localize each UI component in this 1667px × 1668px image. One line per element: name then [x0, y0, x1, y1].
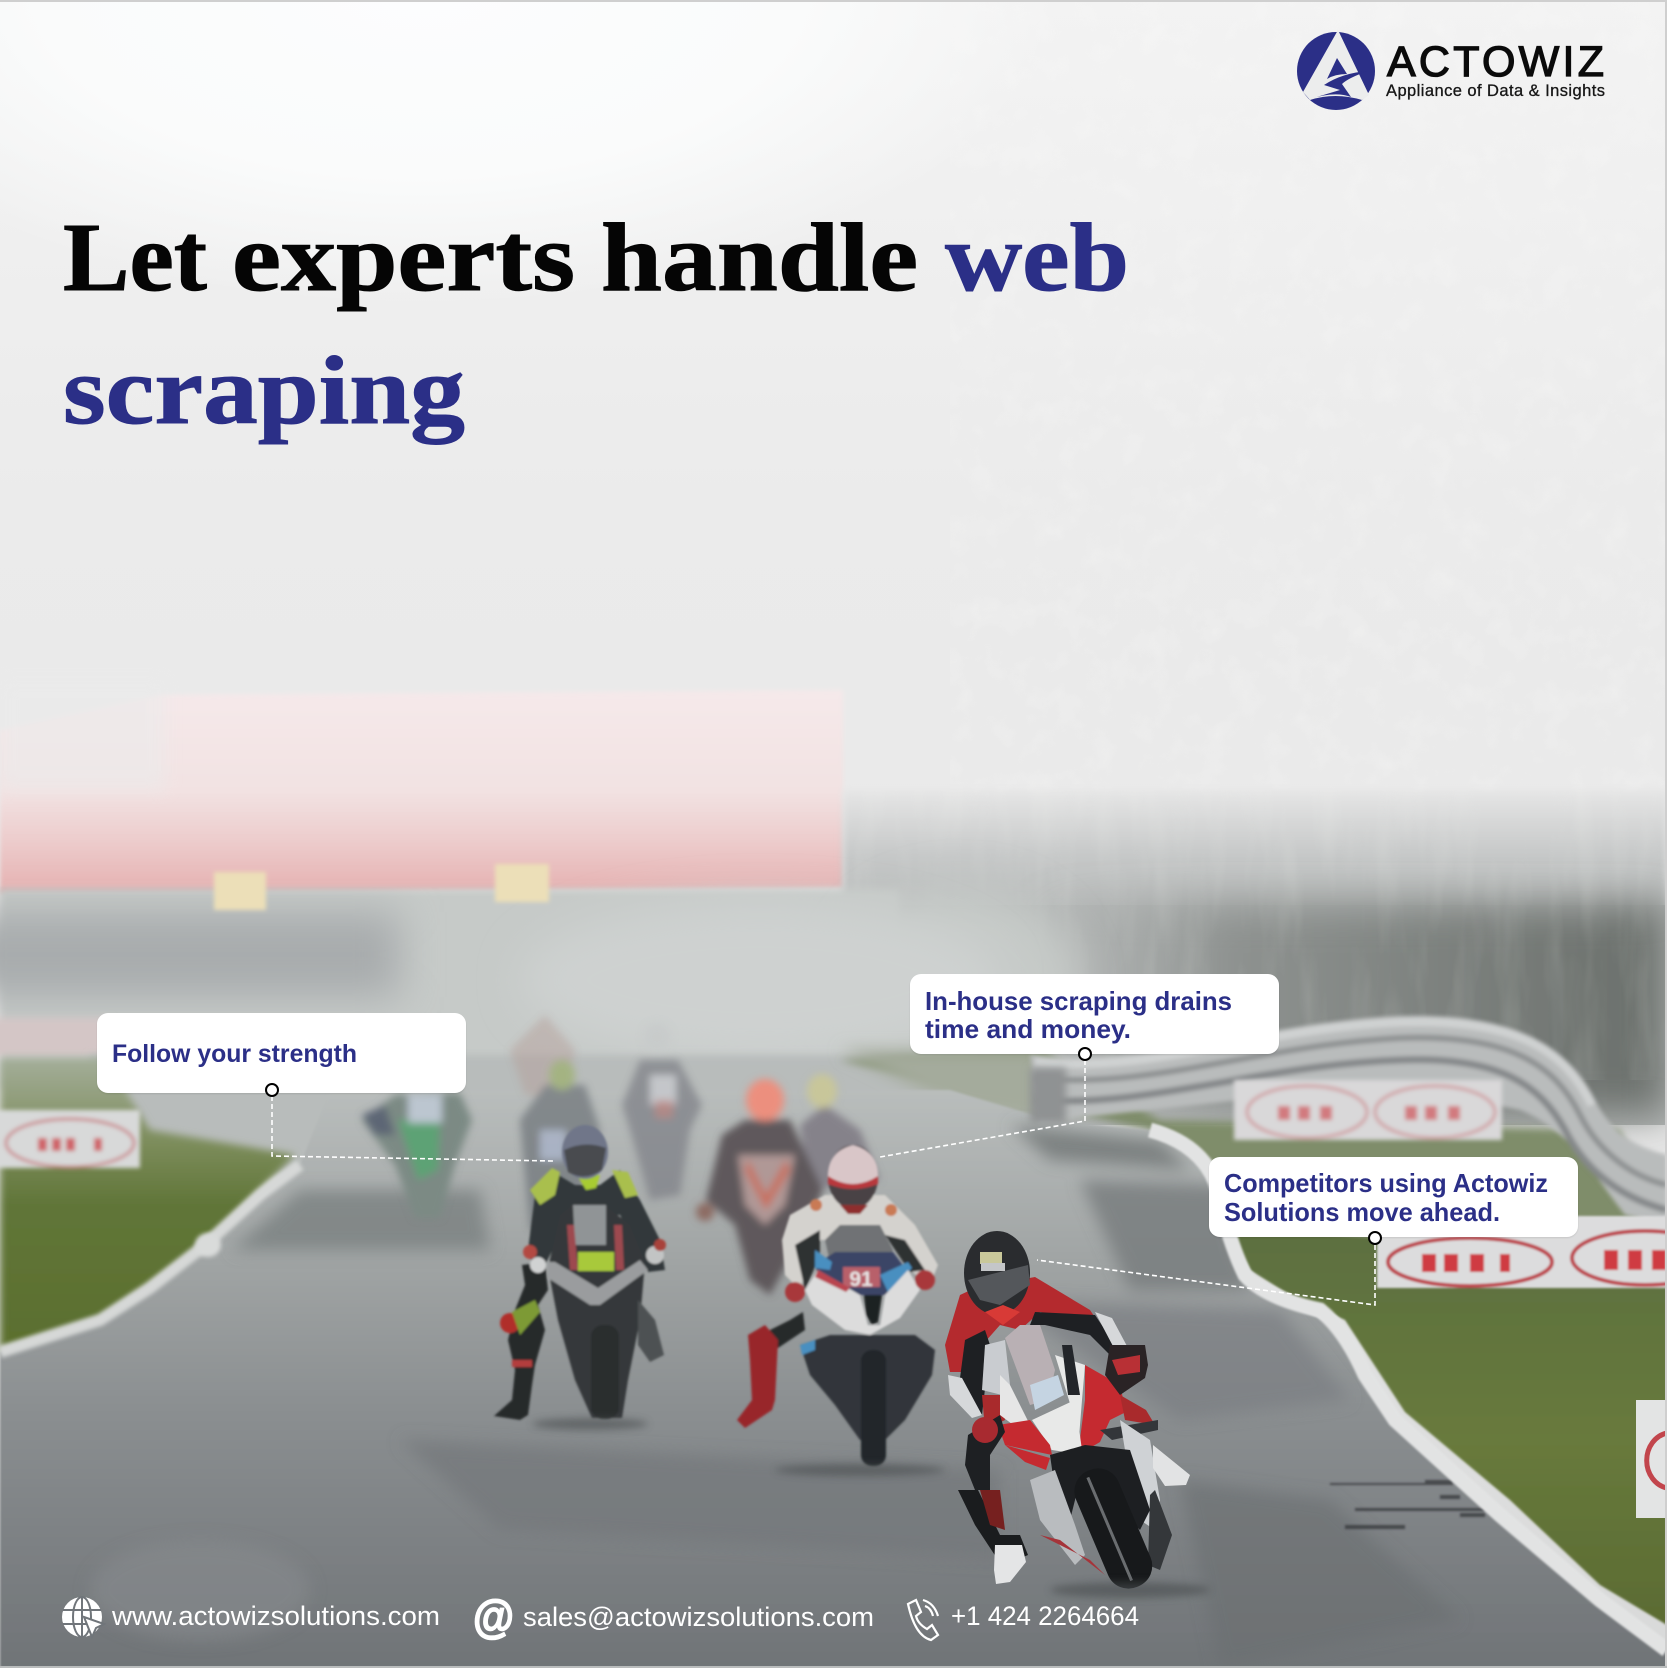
title: scraping [63, 337, 465, 445]
right kerb [1150, 1130, 1667, 1650]
callout: in-house scraping [910, 974, 1279, 1060]
leader line: in-house scraping [880, 1060, 1085, 1157]
icon: globe [62, 1597, 104, 1637]
HEL sign front [1377, 1216, 1667, 1288]
website: www.actowizsolutions.com [111, 1601, 440, 1631]
rider B [737, 1145, 938, 1466]
title [63, 204, 1129, 445]
number 91: 91 [849, 1268, 873, 1291]
tyre barrier [1030, 1016, 1667, 1225]
phone number: +1 424 2264664 [951, 1601, 1139, 1631]
grey wall right [843, 790, 1667, 920]
callout: follow your strength: Follow your strength [112, 1040, 357, 1068]
callout: in-house scraping: In-house scraping drains [925, 986, 1232, 1016]
HEL sign left [0, 1110, 140, 1168]
callout: competitors: Competitors using Actowiz [1224, 1168, 1548, 1198]
title: experts [232, 204, 575, 312]
HEL sign back [1234, 1080, 1502, 1140]
road mist [90, 1055, 1050, 1175]
misty tree texture [950, 0, 1667, 800]
callout: follow your strength [97, 1013, 466, 1096]
callout: competitors: Solutions move ahead. [1224, 1197, 1500, 1227]
yellow boards [214, 864, 549, 910]
green bike [362, 1093, 472, 1218]
corner sign right [1636, 1400, 1667, 1518]
skid marks [1330, 1480, 1485, 1529]
wet road reflections [532, 1418, 1210, 1598]
rider A [494, 1125, 666, 1420]
road [0, 1090, 1667, 1668]
logo mark [1297, 30, 1375, 110]
leader line: follow your strength [272, 1096, 553, 1161]
far red rider [696, 1074, 880, 1295]
grass left [0, 1058, 295, 1352]
title: handle [601, 204, 918, 312]
grass right [1225, 1230, 1667, 1625]
grass centre right [840, 1050, 1667, 1300]
wordmark: ACTOWIZ [1387, 38, 1604, 86]
mist band under hoarding [0, 889, 900, 1089]
rider C [945, 1231, 1190, 1596]
tagline: Appliance of Data & Insights [1386, 82, 1605, 100]
dark road patches [90, 1125, 1460, 1668]
tree line right [1030, 905, 1667, 1115]
faded sign far left [0, 1018, 110, 1056]
left kerb [0, 1165, 300, 1352]
title: web [945, 204, 1129, 312]
callout: competitors [1209, 1157, 1578, 1244]
callout: in-house scraping: time and money. [925, 1014, 1131, 1044]
email: sales@actowizsolutions.com [523, 1602, 874, 1632]
footer contact bar [62, 1590, 1139, 1642]
leader line: competitors [1037, 1245, 1375, 1305]
distant riders [510, 1015, 702, 1230]
icon: at sign: @ [473, 1590, 514, 1642]
pink hoarding [0, 690, 843, 894]
title: Let [63, 204, 207, 312]
logo [1297, 30, 1605, 110]
icon: phone [908, 1600, 938, 1640]
